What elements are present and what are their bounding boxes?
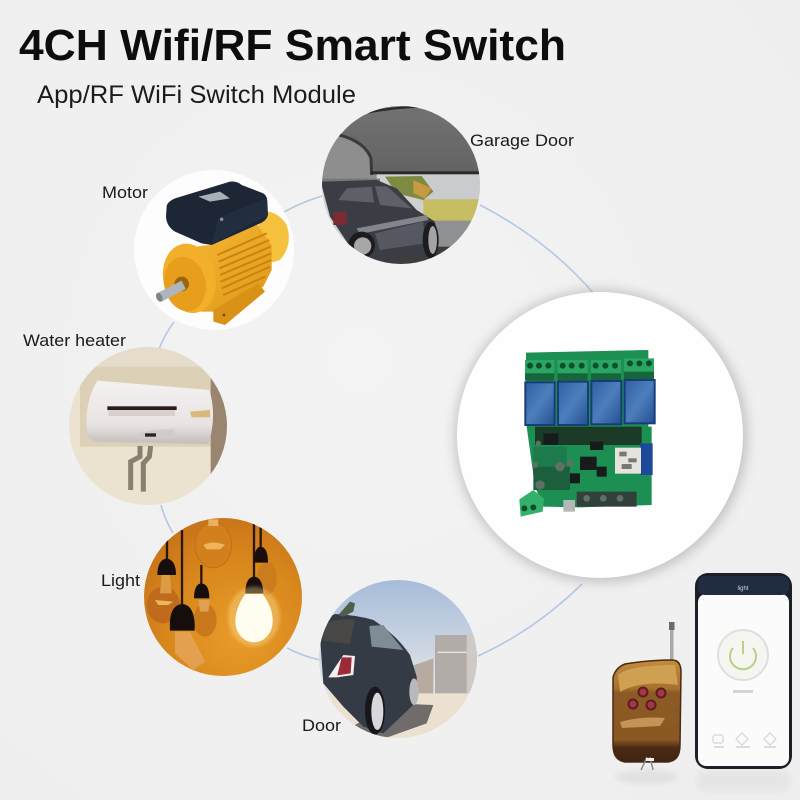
panel: water heater xyxy=(67,347,233,507)
label: motor: Motor xyxy=(102,184,149,202)
connector ring xyxy=(158,196,596,660)
panel: door xyxy=(317,578,478,743)
icon: smartphone app xyxy=(695,573,792,792)
label: garage door: Garage Door xyxy=(470,132,575,150)
label: water heater: Water heater xyxy=(23,332,127,350)
title: 4CH Wifi/RF Smart Switch xyxy=(19,21,566,70)
subtitle: App/RF WiFi Switch Module xyxy=(37,81,356,109)
icon: rf remote xyxy=(613,622,681,784)
panel: garage door xyxy=(320,105,485,270)
label: light: Light xyxy=(101,572,140,590)
panel: light xyxy=(144,518,302,676)
panel: module circle xyxy=(455,290,747,582)
icon: smartphone app: light xyxy=(737,586,749,592)
label: door: Door xyxy=(302,717,342,735)
motor illustration xyxy=(155,181,289,325)
relay board xyxy=(519,350,655,517)
panel: motor xyxy=(134,170,294,330)
power button xyxy=(718,630,768,680)
